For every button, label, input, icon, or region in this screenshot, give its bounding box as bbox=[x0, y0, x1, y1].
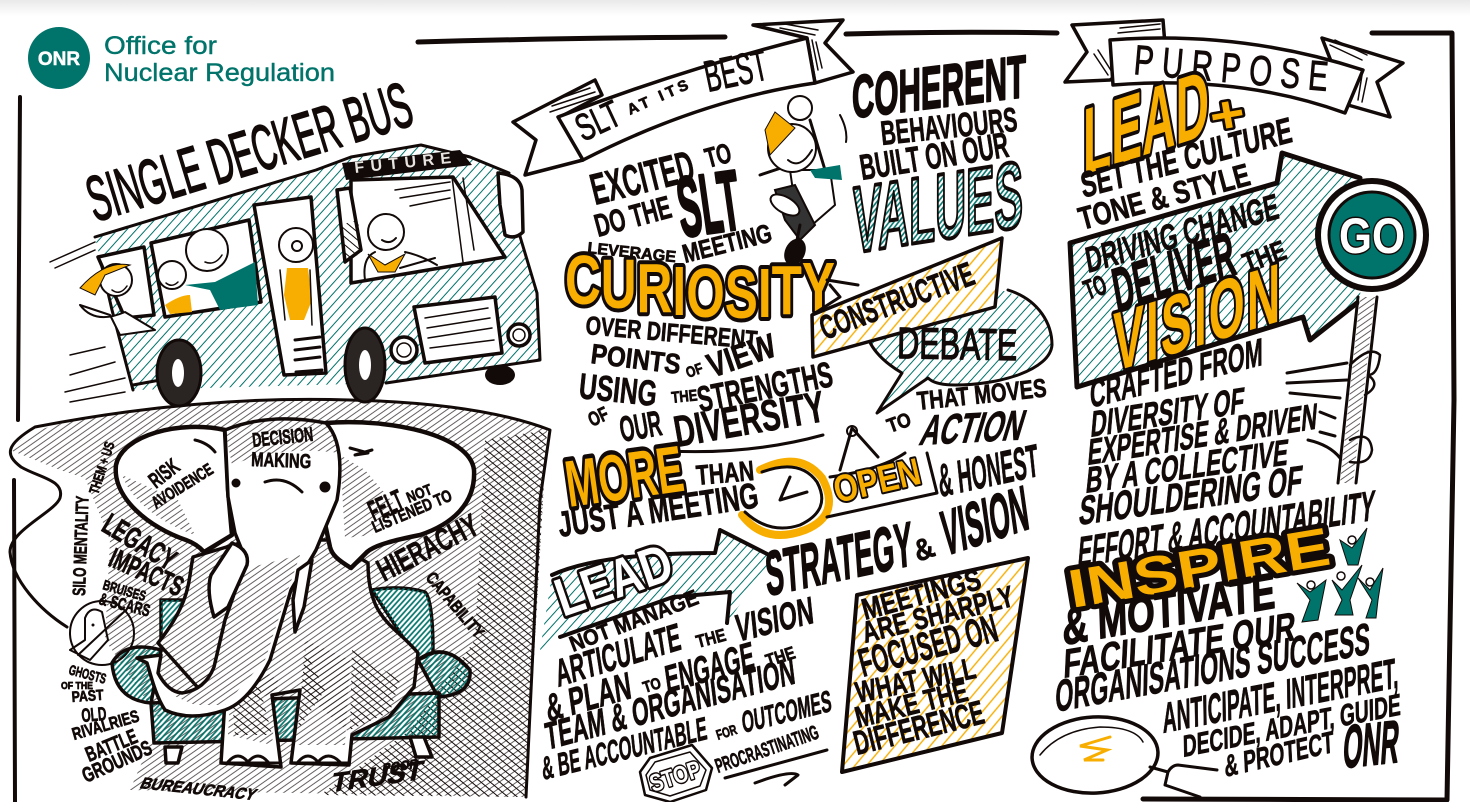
text: more than just a meeting: MORE bbox=[561, 431, 688, 521]
text: crafted from diversity of expertise: DIVERSITY OF bbox=[1089, 379, 1246, 445]
panel: SLT at its best bbox=[513, 20, 1052, 802]
arrow: driving change to deliver the vision: DELIVER bbox=[1107, 219, 1240, 327]
banner: SLT at its best: SLT bbox=[569, 93, 628, 150]
elephant labels: RIVALRIES bbox=[70, 707, 141, 744]
bus mirrors bbox=[337, 173, 523, 262]
elephant eyes bbox=[195, 440, 372, 492]
text: strategy and vision: STRATEGY bbox=[763, 510, 915, 610]
bus destination board: FUTURE bbox=[342, 150, 472, 180]
banner: SLT at its best: AT ITS bbox=[625, 77, 691, 119]
room walls hatching bbox=[10, 399, 547, 797]
arrow: lead not manage bbox=[540, 530, 773, 657]
elephant labels: BRUISES bbox=[101, 577, 148, 604]
elephant tusks bbox=[209, 543, 312, 632]
panel: meetings sharply focused: WHAT WILL bbox=[853, 652, 979, 710]
bus windows bbox=[98, 177, 505, 318]
text: articulate the vision: FOR bbox=[714, 721, 739, 743]
text: over different points of view: OF bbox=[684, 360, 705, 382]
text: inspire and motivate: INSPIRE bbox=[1064, 517, 1334, 620]
banner: purpose: PURPOSE bbox=[1132, 36, 1330, 100]
elephant labels: CAPABILITY bbox=[422, 568, 488, 642]
banner: SLT at its best: BEST bbox=[700, 41, 772, 102]
elephant bbox=[116, 419, 474, 767]
text: articulate the vision: TEAM & ORGANISATION bbox=[543, 649, 797, 759]
logo: Office for Nuclear Regulation: Nuclear Regulation bbox=[104, 59, 335, 87]
arrow: driving change to deliver the vision: DRIVING CHANGE bbox=[1082, 185, 1282, 281]
text: articulate the vision: ENGAGE bbox=[662, 634, 757, 702]
person 4 bbox=[1358, 568, 1383, 618]
text: coherent behaviours built on our bbox=[852, 42, 1026, 188]
icon: go sign: GO bbox=[1339, 208, 1405, 264]
elephant labels: MAKING bbox=[251, 449, 312, 473]
elephant labels: OF THE bbox=[61, 681, 93, 692]
panel: meetings sharply focused: DIFFERENCE bbox=[850, 694, 988, 763]
text: lead and set the culture: SET THE CULTURE bbox=[1078, 109, 1295, 206]
text: crafted from diversity of expertise bbox=[1076, 330, 1377, 577]
banner: SLT at its best bbox=[513, 20, 853, 175]
text: articulate the vision: & PLAN bbox=[543, 664, 634, 731]
icon: clock bbox=[742, 462, 829, 535]
text: over different points of view: OVER DIFFERENT bbox=[584, 310, 759, 355]
person 3 bbox=[1332, 565, 1362, 615]
text: using the strengths of our diversity: STRENGTHS bbox=[694, 353, 836, 420]
bus motion lines bbox=[50, 242, 125, 402]
text: excited to do the SLT meeting: MEETING bbox=[679, 218, 775, 269]
text: articulate the vision: VISION bbox=[733, 589, 816, 651]
logo: Office for Nuclear Regulation: ONR bbox=[38, 49, 80, 70]
elephant labels: AVOIDENCE bbox=[148, 460, 217, 512]
icon: cheering people bbox=[1297, 528, 1383, 622]
elephant labels: LEGACY bbox=[96, 508, 182, 577]
text: crafted from diversity of expertise: SHOULDERING OF bbox=[1077, 456, 1305, 534]
text: anticipate interpret decide adapt guide protect ONR: & PROTECT bbox=[1224, 726, 1335, 784]
bus body bbox=[95, 145, 540, 390]
elephant left ear bbox=[116, 427, 232, 552]
text: facilitate our organisations success bbox=[1055, 603, 1371, 722]
text: coherent behaviours built on our: BUILT ON OUR bbox=[857, 124, 1011, 188]
room cross hatching bbox=[320, 430, 547, 797]
bus passengers bbox=[80, 214, 437, 335]
panel: meetings sharply focused: MAKE THE bbox=[852, 675, 971, 735]
text: using the strengths of our diversity: OUR bbox=[616, 402, 665, 450]
text: facilitate our organisations success: FACILITATE OUR bbox=[1063, 603, 1297, 687]
text: more than just a meeting bbox=[555, 431, 761, 545]
text: lead and set the culture: + bbox=[1205, 84, 1250, 147]
text: crafted from diversity of expertise: CRAFTED FROM bbox=[1090, 330, 1263, 417]
text: crafted from diversity of expertise: BY A COLLECTIVE bbox=[1084, 431, 1291, 501]
text: coherent behaviours built on our: BEHAVIOURS bbox=[879, 101, 1019, 153]
room outline bbox=[10, 399, 550, 797]
callout: constructive debate: DEBATE bbox=[897, 319, 1018, 370]
callout: constructive debate: ACTION bbox=[915, 402, 1031, 455]
panel: meetings sharply focused: FOCUSED ON bbox=[854, 606, 1002, 686]
passenger: waving woman bbox=[80, 264, 155, 335]
text: articulate the vision: TO bbox=[641, 675, 663, 697]
sign: open and honest: OPEN bbox=[830, 451, 925, 512]
elephant labels: RISK bbox=[144, 453, 184, 493]
elephant labels: & SCARS bbox=[97, 589, 152, 620]
text: using the strengths of our diversity: DIVERSITY bbox=[670, 382, 828, 457]
hands holding pole bbox=[1350, 352, 1380, 462]
text: excited to do the SLT meeting: TO bbox=[702, 137, 735, 174]
text: using the strengths of our diversity: USING bbox=[577, 365, 659, 414]
elephant labels: PAST bbox=[71, 687, 104, 706]
arrow: driving change to deliver the vision bbox=[1070, 153, 1365, 390]
elephant labels: TRUST bbox=[329, 755, 427, 798]
icon: jumping man bbox=[760, 96, 846, 269]
arrow: lead not manage: LEAD bbox=[547, 533, 680, 628]
arrow: driving change to deliver the vision: VISION bbox=[1113, 245, 1280, 390]
elephant labels: LISTENED TO bbox=[369, 486, 455, 537]
elephant labels: HIERACHY bbox=[371, 507, 484, 588]
callout: constructive debate: CONSTRUCTIVE bbox=[814, 255, 980, 347]
text: curiosity: CURIOSITY bbox=[565, 241, 835, 333]
text: articulate the vision: THE bbox=[763, 643, 798, 671]
elephant labels: GROUNDS bbox=[79, 736, 156, 788]
text: more than just a meeting: JUST A MEETING bbox=[555, 475, 761, 545]
elephant labels: BATTLE bbox=[82, 725, 141, 767]
icon: stop sign and procrastinating bbox=[640, 722, 827, 802]
passenger: woman with yellow top bbox=[158, 261, 192, 314]
logo: Office for Nuclear Regulation: Office for bbox=[104, 32, 217, 60]
text: over different points of view bbox=[584, 310, 781, 386]
text: & HONEST bbox=[936, 434, 1041, 507]
panel: meetings sharply focused bbox=[842, 558, 1028, 772]
text: strategy and vision: & bbox=[909, 531, 939, 569]
text: lead and set the culture: TONE & STYLE bbox=[1074, 156, 1254, 237]
armchair bbox=[112, 588, 470, 763]
panel: purpose bbox=[1030, 20, 1426, 797]
panel: SLT at its best: VALUES bbox=[853, 142, 1023, 274]
text: using the strengths of our diversity: OF bbox=[585, 403, 612, 432]
arrow: driving change to deliver the vision: THE bbox=[1238, 234, 1290, 279]
text: inspire and motivate: & MOTIVATE bbox=[1061, 562, 1276, 656]
elephant labels: FELT bbox=[363, 484, 409, 528]
elephant labels: SILO MENTALITY bbox=[69, 496, 92, 596]
panel: elephant in the room bbox=[10, 399, 550, 802]
text: using the strengths of our diversity bbox=[577, 353, 836, 457]
elephant labels: THEM + US bbox=[86, 440, 118, 496]
arrow: lead not manage: NOT MANAGE bbox=[566, 585, 702, 657]
bus wheels bbox=[157, 328, 515, 406]
text: lead and set the culture: LEAD bbox=[1083, 50, 1209, 195]
elephant labels: OLD bbox=[81, 704, 107, 727]
person 1 bbox=[1340, 528, 1367, 565]
bus destination board: FUTURE: FUTURE bbox=[354, 150, 452, 177]
text: articulate the vision: THE bbox=[694, 625, 728, 652]
text: anticipate interpret decide adapt guide protect ONR bbox=[1162, 649, 1402, 784]
elephant right ear bbox=[320, 422, 474, 568]
sign: open and honest bbox=[827, 426, 1041, 517]
text: coherent behaviours built on our: COHERENT bbox=[852, 42, 1026, 131]
logo: Office for Nuclear Regulation bbox=[28, 27, 335, 89]
bus grille and lights bbox=[391, 297, 530, 363]
callout: constructive debate bbox=[812, 238, 1052, 455]
text: leverage: LEVERAGE bbox=[587, 240, 677, 266]
panel: single decker bus bbox=[50, 68, 540, 406]
elephant labels: NOT bbox=[404, 481, 435, 507]
text: crafted from diversity of expertise: EXPERTISE & DRIVEN bbox=[1086, 395, 1319, 473]
text: lead and set the culture bbox=[1074, 50, 1295, 237]
elephant body and legs bbox=[158, 540, 418, 767]
text: articulate the vision: & BE ACCOUNTABLE bbox=[540, 710, 709, 787]
text: excited to do the SLT meeting: SLT bbox=[671, 153, 746, 256]
top shadow band bbox=[0, 0, 1470, 16]
bus driver bbox=[364, 214, 437, 280]
elephant toes bbox=[221, 756, 349, 763]
text: excited to do the SLT meeting: DO THE bbox=[590, 189, 675, 244]
panel: SLT at its best: VISION bbox=[937, 472, 1033, 570]
elephant labels: IMPACTS bbox=[105, 542, 188, 602]
panel: meetings sharply focused: MEETINGS bbox=[858, 563, 985, 627]
text: over different points of view: VIEW bbox=[702, 327, 781, 386]
text: more than just a meeting: THAN bbox=[695, 455, 755, 491]
debate speech bubble bbox=[868, 290, 1052, 413]
text: articulate the vision: ARTICULATE bbox=[553, 615, 684, 696]
elephant labels bbox=[61, 424, 488, 802]
elephant labels: DECISION bbox=[251, 424, 314, 452]
text: articulate the vision: OUTCOMES bbox=[740, 685, 833, 740]
icon: ghost logo bbox=[70, 601, 134, 665]
bus door bbox=[254, 197, 326, 375]
text: over different points of view: POINTS bbox=[589, 338, 682, 380]
passenger: person with glasses bbox=[279, 228, 313, 325]
person 2 bbox=[1297, 580, 1326, 622]
callout: constructive debate: THAT MOVES bbox=[915, 373, 1048, 416]
icon: magnifying glass bbox=[1030, 714, 1217, 797]
icon: stop sign and procrastinating: PROCRASTINATING bbox=[712, 722, 822, 778]
elephant labels: POOR bbox=[382, 756, 420, 776]
passenger: man in teal shirt bbox=[185, 229, 258, 310]
text: excited to do the SLT meeting: EXCITED bbox=[586, 142, 699, 215]
icon: stop sign and procrastinating: STOP bbox=[647, 756, 704, 798]
motion lines by pole bbox=[1287, 363, 1347, 458]
constructive box bbox=[812, 238, 1002, 357]
banner: purpose bbox=[1065, 20, 1403, 117]
icon: go sign bbox=[1318, 181, 1426, 483]
text: excited to do the SLT meeting bbox=[586, 137, 775, 269]
elephant labels: GHOSTS bbox=[67, 661, 108, 687]
elephant head and trunk bbox=[137, 419, 340, 716]
text: using the strengths of our diversity: THE bbox=[671, 387, 699, 407]
arrow: driving change to deliver the vision: TO bbox=[1079, 269, 1111, 306]
panel: meetings sharply focused: ARE SHARPLY bbox=[859, 580, 1017, 650]
text: articulate the vision bbox=[540, 589, 833, 787]
callout: constructive debate: TO bbox=[884, 409, 914, 438]
